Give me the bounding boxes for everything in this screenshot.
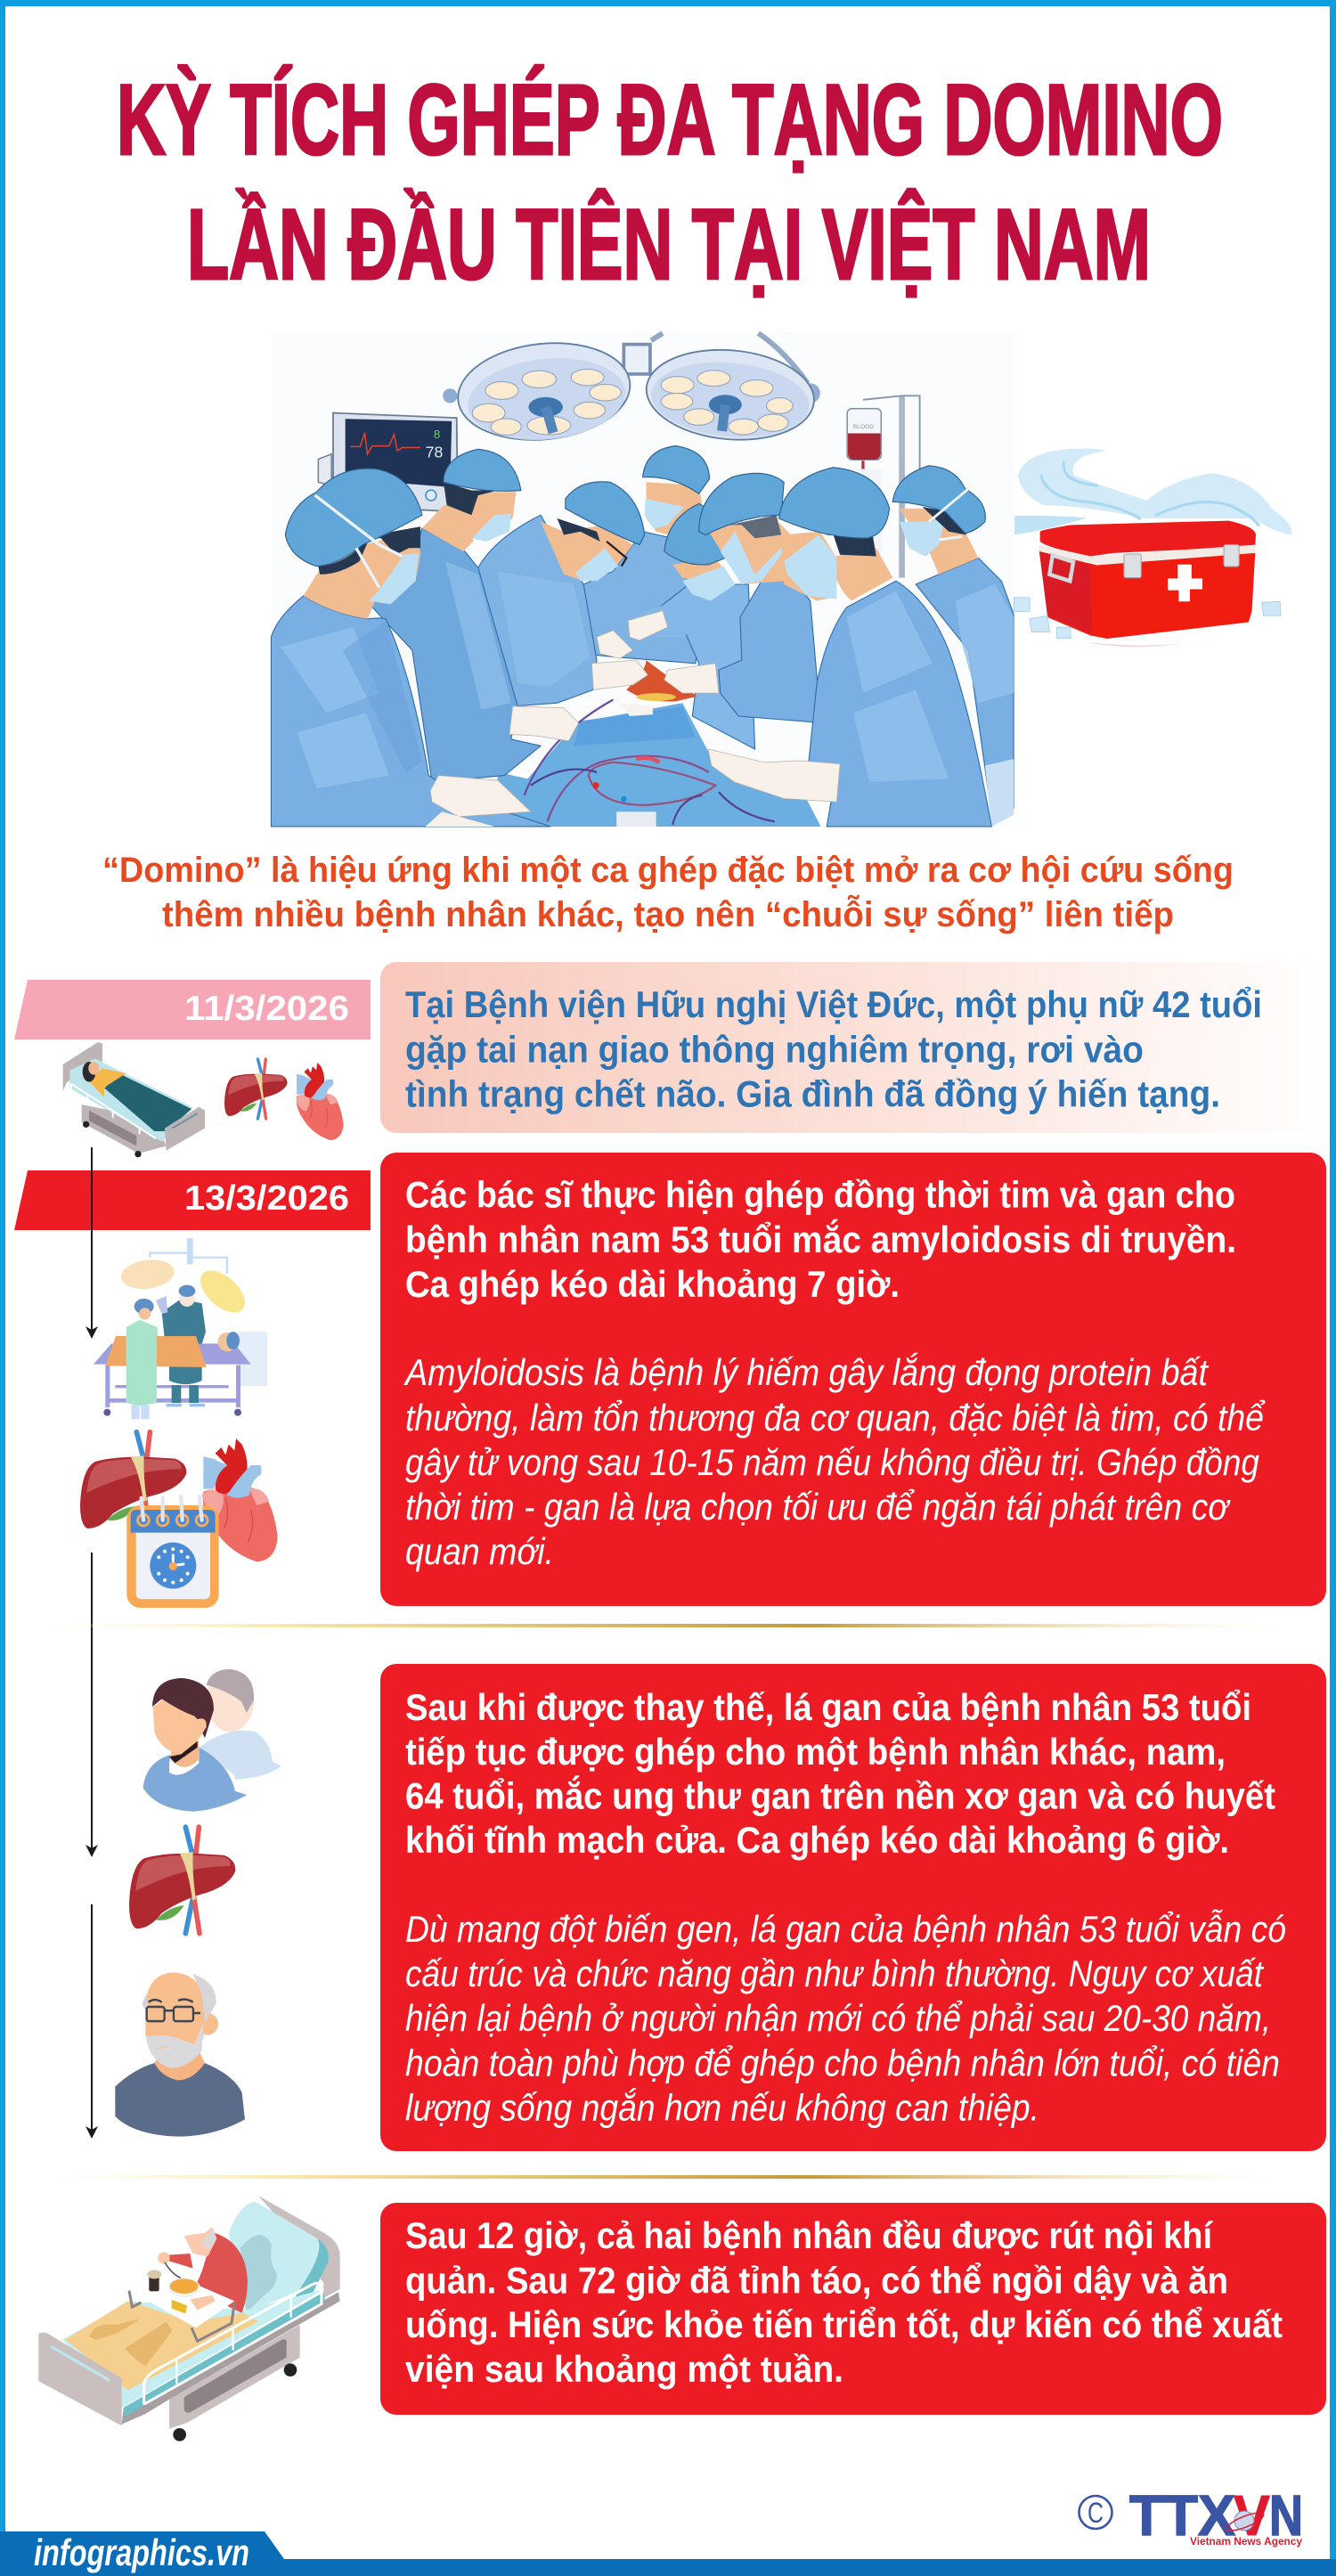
- figure: front-right surgeon: [708, 468, 991, 827]
- panel: domino liver transplant: lượng sống ngắn hơn nếu không can thiệp.: [405, 2086, 1039, 2129]
- figure: front-left surgeon: [271, 469, 550, 827]
- panel: domino liver transplant: khối tĩnh mạch cửa. Ca ghép kéo dài khoảng 6 giờ.: [405, 1819, 1229, 1861]
- panel: recovery: Sau 12 giờ, cả hai bệnh nhân đều được rút nội khí: [405, 2214, 1213, 2256]
- panel: domino liver transplant: Sau khi được thay thế, lá gan của bệnh nhân 53 tuổi: [405, 1686, 1251, 1728]
- illustration: surgical team in operating room: [271, 332, 1291, 827]
- figure: fourth surgeon: [699, 473, 821, 722]
- surgical gloves: [591, 611, 719, 693]
- figure: third surgeon leaning: [478, 482, 645, 706]
- footer bar: infographics.vn: [34, 2531, 249, 2573]
- footer bar: [0, 2531, 1336, 2576]
- date tag: 11/3/2026: 11/3/2026: [184, 990, 349, 1028]
- icon: IV stand with blood bag: BLOOD: [853, 424, 874, 430]
- panel: recovery: viện sau khoảng một tuần.: [405, 2348, 843, 2390]
- date tag: 13/3/2026: 13/3/2026: [184, 1179, 349, 1218]
- figure: rear surgeon: [581, 446, 710, 664]
- arrow: donor to transplant: [86, 1147, 98, 1339]
- icon: organ transport cooler: [1014, 449, 1291, 647]
- icon: patient eating in hospital bed: [38, 2196, 340, 2441]
- icon: donor on hospital bed: [63, 1042, 205, 1157]
- figure: second surgeon: [370, 449, 579, 782]
- panel: heart-liver transplant: quan mới.: [405, 1530, 554, 1572]
- figure: rightmost surgeon: [892, 466, 1014, 827]
- panel: hospital donor: gặp tai nạn giao thông nghiêm trọng, rơi vào: [405, 1028, 1144, 1071]
- arrow: to recipient: [86, 1904, 98, 2139]
- panel: domino liver transplant: tiếp tục được ghép cho một bệnh nhân khác, nam,: [405, 1731, 1226, 1773]
- panel: hospital donor: tình trạng chết não. Gia đình đã đồng ý hiến tạng.: [405, 1072, 1220, 1115]
- panel: heart-liver transplant: [380, 1153, 1326, 1606]
- subtitle: thêm nhiều bệnh nhân khác, tạo nên “chuỗi sự sống” liên tiếp: [162, 893, 1174, 934]
- logo: TTXVN: Vietnam News Agency: [1190, 2535, 1302, 2547]
- icon: elderly recipient: [115, 1972, 245, 2137]
- icon: heart, transplanted: [202, 1439, 278, 1561]
- figure: low-bending surgeon: [633, 503, 755, 749]
- panel: recovery: quản. Sau 72 giờ đã tỉnh táo, có thể ngồi dậy và ăn: [405, 2259, 1228, 2302]
- panel: hospital donor: [380, 962, 1327, 1133]
- patient drape and tubing: [494, 700, 821, 827]
- arrow: to second transplant: [86, 1553, 98, 1857]
- subtitle: “Domino” là hiệu ứng khi một ca ghép đặc biệt mở ra cơ hội cứu sống: [102, 851, 1234, 890]
- panel: heart-liver transplant: bệnh nhân nam 53 tuổi mắc amyloidosis di truyền.: [405, 1218, 1236, 1260]
- icon: operating team scene: [94, 1238, 267, 1419]
- panel: hospital donor: Tại Bệnh viện Hữu nghị Việt Đức, một phụ nữ 42 tuổi: [405, 983, 1262, 1025]
- logo: copyright mark: [1079, 2496, 1112, 2529]
- logo: copyright mark: C: [1088, 2497, 1104, 2529]
- icon: heart: [296, 1063, 344, 1140]
- logo: TTXVN: V: [1234, 2483, 1270, 2547]
- panel: heart-liver transplant: thời tim - gan là lựa chọn tối ưu để ngăn tái phát trên cơ: [405, 1486, 1231, 1528]
- date tag: 11/3/2026: [14, 980, 371, 1039]
- icon: donated liver: [129, 1827, 235, 1934]
- logo: TTXVN: N: [1269, 2483, 1303, 2547]
- date tag: 13/3/2026: [14, 1170, 371, 1230]
- panel: domino liver transplant: [380, 1664, 1326, 2151]
- panel: heart-liver transplant: Ca ghép kéo dài khoảng 7 giờ.: [405, 1263, 900, 1305]
- icon: two patients: [143, 1669, 281, 1812]
- icon: patient monitor: [318, 413, 458, 512]
- logo: TTXVN: [1129, 2483, 1303, 2547]
- panel: domino liver transplant: 64 tuổi, mắc ung thư gan trên nền xơ gan và có huyết: [405, 1774, 1275, 1817]
- surgical site: [620, 660, 697, 716]
- icon: IV stand with blood bag: [847, 395, 920, 578]
- icon: operating lamps: [443, 333, 820, 448]
- icon: calendar with clock: [126, 1496, 219, 1608]
- panel: heart-liver transplant: Amyloidosis là bệnh lý hiếm gây lắng đọng protein bất: [403, 1351, 1210, 1393]
- title: [117, 64, 1223, 300]
- logo: TTXVN: TTX: [1129, 2483, 1235, 2547]
- panel: heart-liver transplant: Các bác sĩ thực hiện ghép đồng thời tim và gan cho: [405, 1174, 1235, 1215]
- subtitle: [102, 851, 1234, 934]
- icon: patient monitor: 8: [434, 428, 440, 441]
- icon: liver: [224, 1059, 288, 1119]
- icon: patient monitor: 78: [426, 444, 443, 461]
- panel: recovery: [380, 2203, 1326, 2415]
- icon: liver, transplanted: [80, 1432, 186, 1533]
